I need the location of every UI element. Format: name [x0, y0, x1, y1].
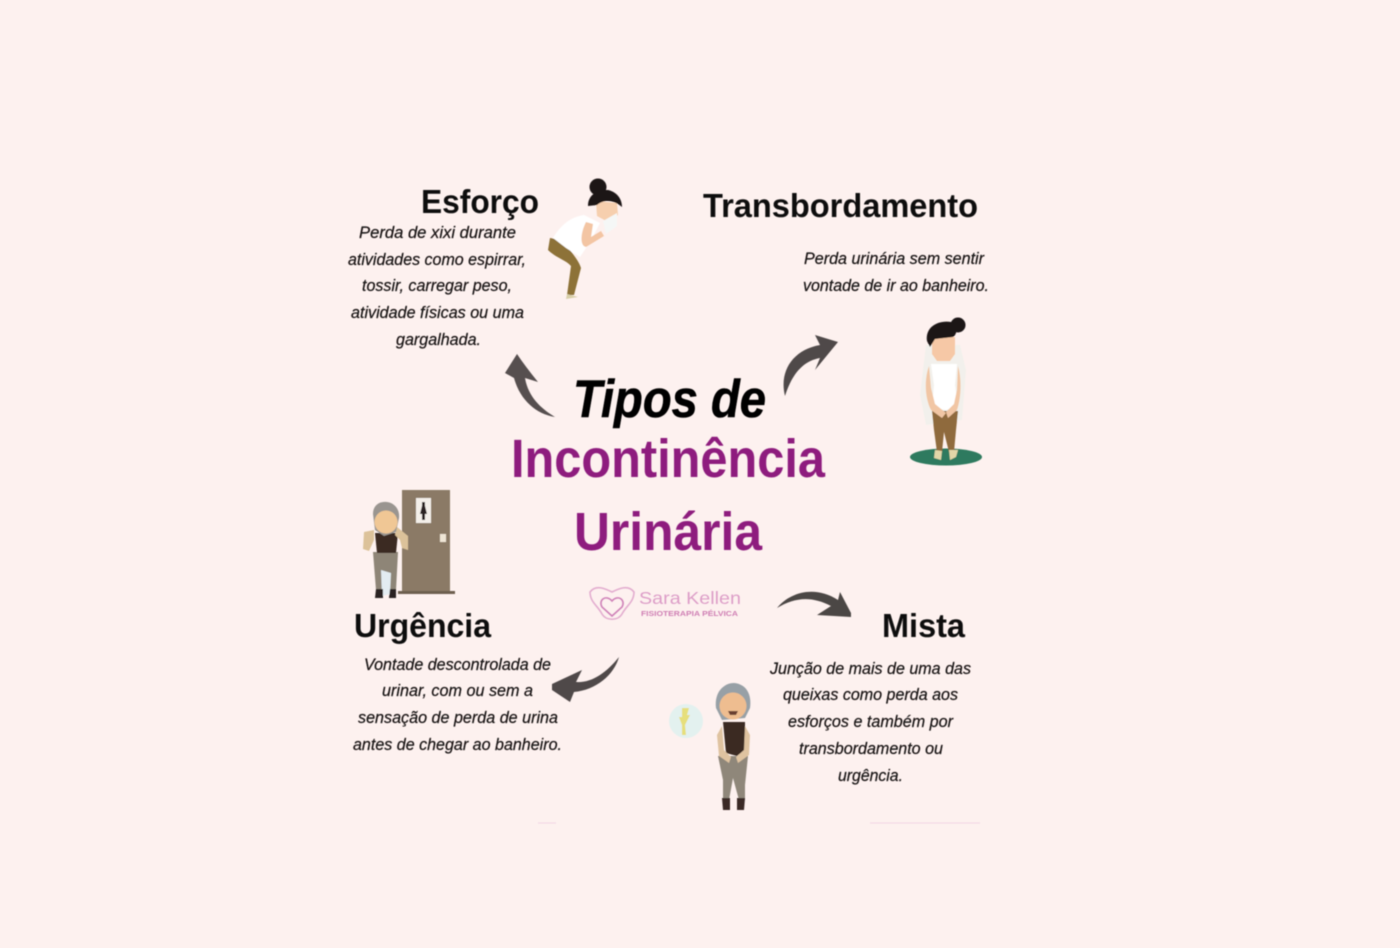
panel: Urgência: [353, 490, 562, 754]
text block: Mista description: urgência.: [838, 767, 903, 785]
text block: Urgência description: sensação de perda de urina: [358, 709, 558, 727]
text block: Esforço description: gargalhada.: [396, 331, 481, 349]
text block: Urgência description: antes de chegar ao banheiro.: [353, 736, 562, 754]
text block: Mista description: [769, 660, 971, 785]
icon: elderly woman with thought bubble: [669, 683, 750, 810]
icon: woman sneezing: [548, 178, 622, 299]
text block: Esforço description: tossir, carregar peso,: [362, 277, 512, 295]
text block: Mista description: transbordamento ou: [799, 740, 943, 758]
icon: woman holding urine: [910, 318, 982, 466]
title: [511, 370, 826, 562]
logo: Sara Kellen: Sara Kellen: [639, 588, 741, 608]
text block: Urgência description: Vontade descontrolada de: [364, 656, 551, 674]
panel: Transbordamento: [703, 187, 989, 466]
arrow: towards Transbordamento: [784, 335, 838, 396]
title: Tipos de: [573, 370, 766, 429]
heading: Esforço: Esforço: [421, 183, 539, 220]
text block: Esforço description: atividades como espirrar,: [348, 251, 526, 269]
logo: Sara Kellen: [590, 588, 741, 619]
text block: Esforço description: atividade físicas ou uma: [351, 304, 524, 322]
arrow: towards Mista: [777, 592, 851, 617]
heading: Mista: Mista: [882, 607, 966, 644]
title: Urinária: [574, 502, 763, 562]
text block: Mista description: Junção de mais de uma das: [769, 660, 971, 678]
text block: Urgência description: [353, 656, 562, 754]
logo: Sara Kellen: FISIOTERAPIA PÉLVICA: [641, 609, 738, 618]
text block: Esforço description: Perda de xixi durante: [359, 224, 516, 242]
arrow: towards Esforço: [505, 354, 555, 417]
heading: Transbordamento: Transbordamento: [703, 187, 978, 224]
panel: Mista: [669, 607, 971, 810]
title: Incontinência: [511, 429, 826, 489]
text block: Transbordamento description: [803, 250, 989, 295]
text block: Esforço description: [348, 224, 526, 349]
arrow: towards Urgência: [552, 657, 619, 702]
text block: Transbordamento description: Perda urinária sem sentir: [804, 250, 985, 268]
text block: Mista description: esforços e também por: [788, 713, 954, 731]
icon: elderly woman at bathroom door: [363, 490, 455, 598]
text block: Transbordamento description: vontade de ir ao banheiro.: [803, 277, 989, 295]
heading: Urgência: Urgência: [354, 607, 492, 644]
panel: Esforço: [348, 178, 622, 349]
text block: Mista description: queixas como perda aos: [783, 686, 958, 704]
bottom edge marks: [538, 822, 980, 824]
text block: Urgência description: urinar, com ou sem a: [382, 682, 533, 700]
